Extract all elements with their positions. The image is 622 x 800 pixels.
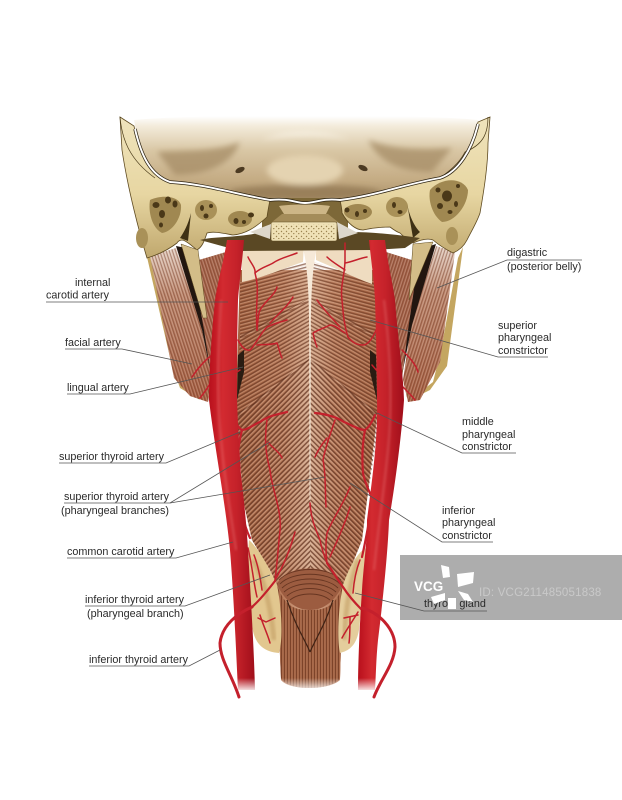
inferior thyroid artery, right loop <box>362 608 395 697</box>
watermark logo <box>414 565 474 609</box>
pharyngeal muscle, right half <box>310 262 380 688</box>
label: inferior thyroid artery (pharyngeal branch) <box>85 575 270 620</box>
lateral muscle and fascia, right <box>386 244 463 402</box>
cranial suture white line <box>135 124 478 203</box>
label: internal carotid artery: carotid artery <box>46 290 110 302</box>
skull base interior <box>134 116 478 200</box>
label: lingual artery: lingual artery <box>67 382 129 394</box>
label: inferior thyroid artery (pharyngeal branch): inferior thyroid artery <box>85 594 185 606</box>
label: superior thyroid artery (pharyngeal branches): (pharyngeal branches) <box>61 505 169 517</box>
label: superior thyroid artery (pharyngeal branches): superior thyroid artery <box>64 491 170 503</box>
label: facial artery: facial artery <box>65 337 121 349</box>
label: digastric (posterior belly): digastric <box>507 247 548 259</box>
pharyngeal muscle, left half <box>236 262 310 688</box>
anatomical illustration <box>120 116 490 697</box>
thyroid gland, right lobe <box>338 548 367 653</box>
sphenoid backing <box>262 198 348 240</box>
label: common carotid artery <box>67 542 233 558</box>
small arterial branches <box>192 243 418 643</box>
label: digastric (posterior belly): (posterior belly) <box>507 261 581 273</box>
label: middle pharyngeal constrictor: middle <box>462 416 494 428</box>
label: thyroid gland <box>355 593 487 611</box>
dark gaps beside arteries <box>237 350 377 400</box>
left carotid artery <box>209 240 255 690</box>
lateral muscle and fascia, left <box>147 246 226 402</box>
label: superior pharyngeal constrictor: constrictor <box>498 345 548 357</box>
label: inferior thyroid artery (pharyngeal branch): (pharyngeal branch) <box>87 608 184 620</box>
label: superior pharyngeal constrictor <box>370 320 551 357</box>
pharyngeal raphe <box>302 245 318 500</box>
carotid bottom fade <box>230 678 380 692</box>
watermark logo: VCG <box>414 579 443 594</box>
watermark panel <box>400 555 622 620</box>
label: superior thyroid artery (pharyngeal branches) <box>61 442 325 517</box>
label: inferior pharyngeal constrictor: inferior <box>442 505 475 517</box>
upper pharynx glandular areas <box>242 243 372 284</box>
label: thyroid gland: thyroid gland <box>424 598 486 610</box>
styloid process, left <box>181 244 207 318</box>
label: inferior thyroid artery <box>89 650 220 666</box>
label: lingual artery <box>67 367 243 394</box>
label: digastric (posterior belly) <box>437 247 582 288</box>
label: superior thyroid artery: superior thyroid artery <box>59 451 165 463</box>
label: common carotid artery: common carotid artery <box>67 546 175 558</box>
inferior constrictor dome <box>277 568 343 610</box>
label: superior pharyngeal constrictor: pharyngeal <box>498 332 551 344</box>
watermark ID text: ID: VCG211485051838 <box>479 587 602 599</box>
label: middle pharyngeal constrictor <box>377 413 516 453</box>
skull base shading <box>157 131 452 199</box>
label: internal carotid artery <box>46 277 228 302</box>
label: inferior pharyngeal constrictor <box>350 483 495 542</box>
label: inferior thyroid artery: inferior thyroid artery <box>89 654 189 666</box>
petrous bone, left <box>120 117 270 258</box>
label: middle pharyngeal constrictor: constrictor <box>462 441 512 453</box>
sphenoid and clivus <box>200 204 420 251</box>
inferior thyroid artery, left loop <box>220 607 252 697</box>
label: inferior pharyngeal constrictor: pharyngeal <box>442 517 495 529</box>
label: inferior pharyngeal constrictor: constrictor <box>442 530 492 542</box>
esophagus muscle <box>277 585 343 688</box>
label: superior thyroid artery <box>59 432 240 463</box>
label: internal carotid artery: internal <box>75 277 110 289</box>
right carotid artery <box>358 240 404 690</box>
thyroid gland, left lobe <box>248 540 281 653</box>
styloid process, right <box>409 242 433 300</box>
label: superior pharyngeal constrictor: superior <box>498 320 537 332</box>
label: middle pharyngeal constrictor: pharyngeal <box>462 429 515 441</box>
petrous bone, right <box>340 117 490 253</box>
label: facial artery <box>65 337 192 364</box>
foramina <box>234 164 369 174</box>
